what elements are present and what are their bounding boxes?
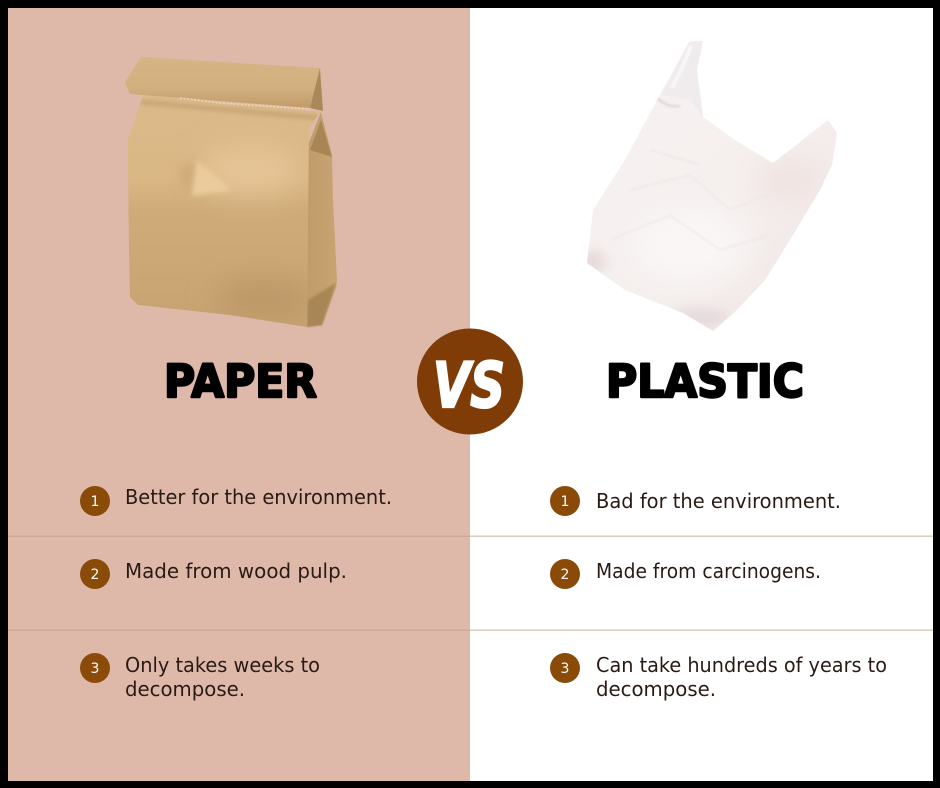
panel: plastic [470,8,933,781]
plastic item 1 [550,486,841,516]
paper item 3: Only takes weeks to [125,653,320,677]
paper item 1 [80,485,392,516]
row dividers [8,536,933,631]
bag folded flap [125,57,320,108]
icon: paper bag [125,57,337,327]
paper item 1: 1 [91,494,99,510]
paper item 2 [80,559,347,589]
plastic item 1: Bad for the environment. [596,489,841,513]
plastic item 3 [550,653,887,701]
heading: PAPER: PAPER [164,355,317,408]
paper item 3: 3 [91,661,99,677]
paper item 1: Better for the environment. [125,485,392,509]
paper item 2: 2 [91,567,99,583]
paper item 3 [80,653,320,701]
plastic item 3: decompose. [596,677,716,701]
plastic item 2: 2 [561,567,569,583]
paper item 2: Made from wood pulp. [125,559,347,583]
heading: PLASTIC: PLASTIC [606,355,804,408]
bag front [128,95,320,327]
plastic item 1: 1 [561,494,569,510]
panel: paper [8,8,470,781]
icon: plastic bag [578,41,837,331]
VS badge [417,328,523,434]
bag side gusset [306,112,337,327]
VS badge: VS [433,349,505,422]
paper item 3: decompose. [125,677,245,701]
plastic item 3: 3 [561,661,569,677]
plastic item 3: Can take hundreds of years to [596,653,887,677]
plastic item 2: Made from carcinogens. [596,559,821,583]
plastic item 2 [550,559,821,589]
